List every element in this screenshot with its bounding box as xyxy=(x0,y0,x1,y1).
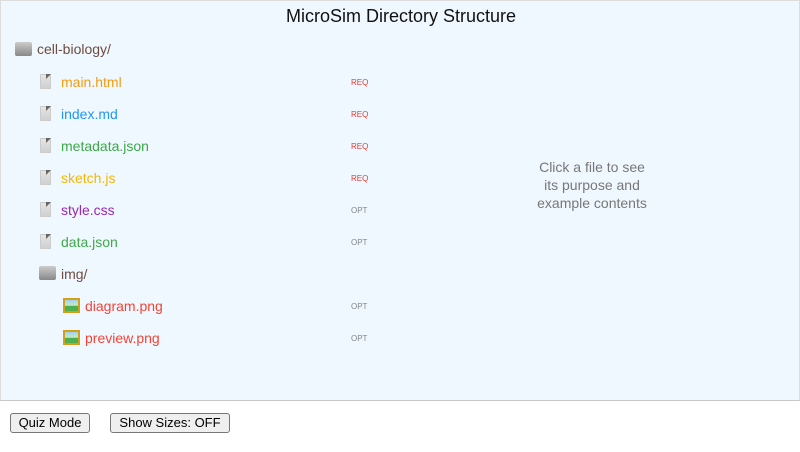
file: diagram.png: OPT xyxy=(351,302,367,311)
file: main.html: main.html xyxy=(61,74,122,90)
file: data.json: data.json xyxy=(61,234,118,250)
info text: Click a file to see xyxy=(539,159,645,175)
button: Quiz Mode xyxy=(10,413,90,433)
folder: img xyxy=(39,266,88,282)
file: diagram.png: diagram.png xyxy=(85,298,163,314)
title: MicroSim Directory Structure xyxy=(286,6,516,26)
file: main.html: REQ xyxy=(351,78,368,87)
file: index.md xyxy=(40,106,368,122)
info text: example contents xyxy=(537,195,647,211)
folder: cell-biology: cell-biology/ xyxy=(37,41,111,57)
file: data.json: OPT xyxy=(351,238,367,247)
button: Show Sizes xyxy=(110,413,230,433)
button: Show Sizes: Show Sizes: OFF xyxy=(119,415,221,430)
file: sketch.js: sketch.js xyxy=(61,170,115,186)
file: index.md: REQ xyxy=(351,110,368,119)
file: preview.png xyxy=(63,330,368,346)
file: style.css: style.css xyxy=(61,202,115,218)
folder: img: img/ xyxy=(61,266,87,282)
file: style.css: OPT xyxy=(351,206,367,215)
file: metadata.json xyxy=(40,138,368,154)
file: sketch.js: REQ xyxy=(351,174,368,183)
button: Quiz Mode: Quiz Mode xyxy=(19,415,81,430)
file: index.md: index.md xyxy=(61,106,118,122)
file: metadata.json: metadata.json xyxy=(61,138,149,154)
file: data.json xyxy=(40,234,368,250)
file: sketch.js xyxy=(40,170,368,186)
file: style.css xyxy=(40,202,368,218)
file: metadata.json: REQ xyxy=(351,142,368,151)
file: preview.png: OPT xyxy=(351,334,367,343)
file: diagram.png xyxy=(63,298,368,314)
info text xyxy=(537,159,647,211)
file: main.html xyxy=(40,74,368,90)
info text: its purpose and xyxy=(544,177,640,193)
file: preview.png: preview.png xyxy=(85,330,160,346)
